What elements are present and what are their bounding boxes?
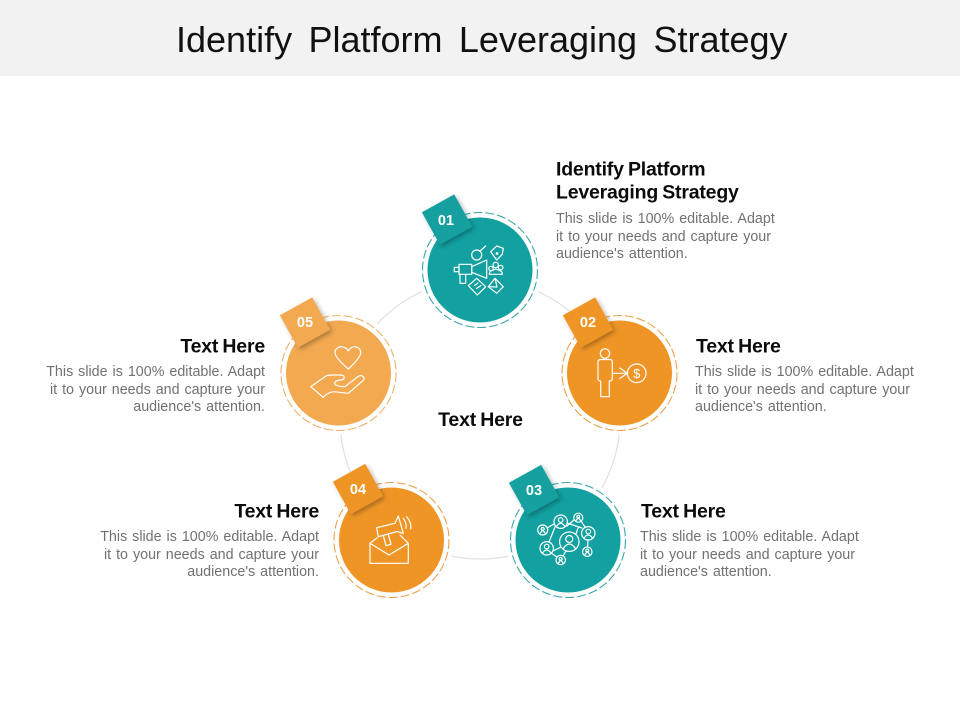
step 04: body text: audience's attention. [187, 564, 319, 580]
step 01: heading: Leveraging Strategy [556, 182, 739, 204]
step 02: body text: it to your needs and capture your [695, 382, 910, 398]
title: Identify Platform Leveraging Strategy [176, 19, 788, 60]
step 02: badge: 02 [580, 315, 596, 331]
step 04: circle [330, 478, 454, 602]
step 01: badge [422, 194, 472, 245]
icon: person and dollar: $ [633, 366, 641, 381]
step 04: body text: This slide is 100% editable. Adapt [100, 529, 319, 545]
step 02: body text: This slide is 100% editable. Adapt [695, 364, 914, 380]
step 05: body text [46, 364, 265, 415]
step 03: badge [509, 465, 559, 515]
step 01: body text: This slide is 100% editable. Adapt [556, 211, 775, 227]
step 04: badge: 04 [350, 482, 366, 498]
step 03: body text: it to your needs and capture your [640, 547, 855, 563]
step 01: body text: it to your needs and capture your [556, 229, 771, 245]
step 05: body text: it to your needs and capture your [50, 382, 265, 398]
step 02: heading: Text Here [696, 336, 781, 358]
step 03: body text: audience's attention. [640, 564, 772, 580]
step 03: circle [506, 478, 630, 602]
icon: megaphone and marketing items [454, 246, 503, 295]
step 01: heading: Identify Platform [556, 158, 705, 180]
step 05: body text: audience's attention. [133, 399, 265, 415]
step 05: badge [280, 297, 330, 348]
step 04: badge [333, 464, 383, 514]
step 03: badge: 03 [526, 483, 542, 499]
icon: envelope with megaphone [370, 516, 411, 563]
step 04: body text [100, 529, 319, 580]
step 02: badge [563, 297, 613, 348]
icon: heart over open hand [311, 347, 364, 397]
step 03: heading: Text Here [641, 500, 726, 522]
step 02: body text: audience's attention. [695, 399, 827, 415]
title bar [0, 0, 960, 76]
step 05: circle [276, 311, 400, 435]
connecting ring [340, 279, 620, 559]
step 03: body text [640, 529, 859, 580]
step 03: body text: This slide is 100% editable. Adapt [640, 529, 859, 545]
step 05: heading: Text Here [180, 336, 265, 358]
step 04: body text: it to your needs and capture your [104, 547, 319, 563]
step 01: body text: audience's attention. [556, 246, 688, 262]
step 05: badge: 05 [297, 315, 313, 331]
icon: people network [538, 513, 595, 565]
step 01: body text [556, 211, 775, 262]
step 01: circle [418, 208, 542, 332]
step 05: body text: This slide is 100% editable. Adapt [46, 364, 265, 380]
step 02: body text [695, 364, 914, 415]
center label: Text Here [438, 409, 523, 431]
step 01: badge: 01 [438, 213, 454, 229]
step 04: heading: Text Here [234, 500, 319, 522]
step 01: heading [556, 158, 739, 204]
step 02: circle [558, 311, 682, 435]
